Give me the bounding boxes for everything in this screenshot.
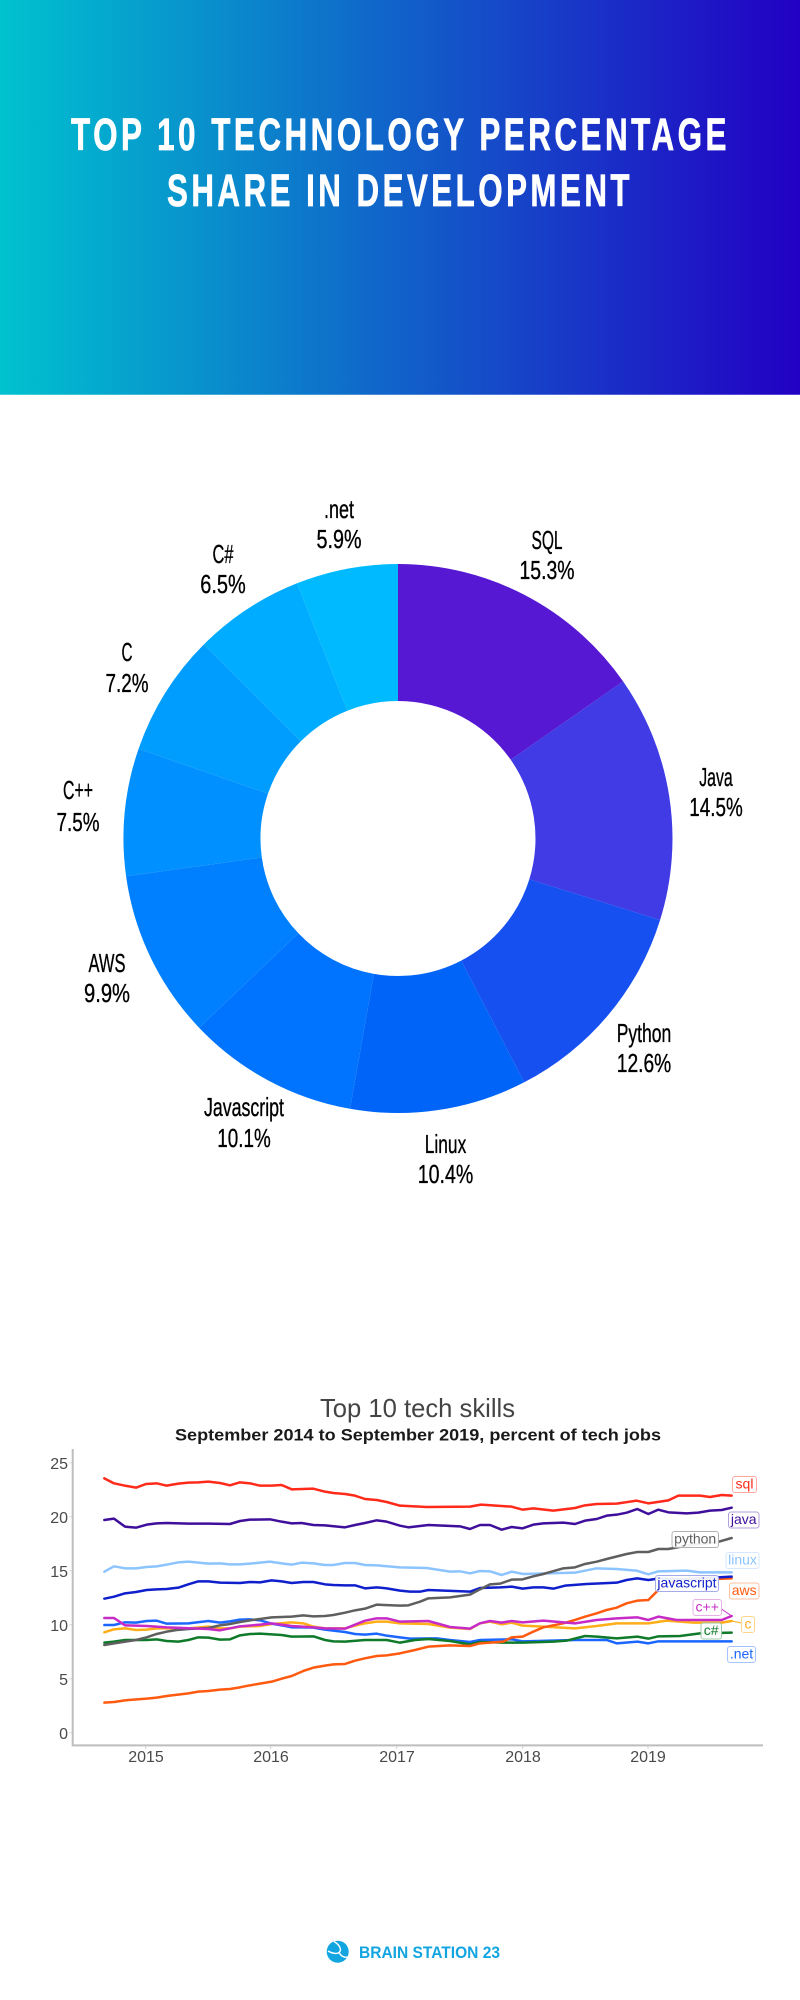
- tag: c++: [693, 1598, 732, 1616]
- slice: AWS: [126, 857, 298, 1028]
- slice: C++: [123, 749, 268, 876]
- line chart axes: 2015: [128, 1749, 164, 1766]
- tag: c: c: [744, 1616, 752, 1632]
- slice: Python: [461, 879, 660, 1082]
- line chart axes: 2019: [630, 1749, 666, 1766]
- series: c++: [104, 1616, 732, 1630]
- brand name: BRAIN STATION 23: [359, 1943, 500, 1962]
- label: Python: 12.6%: [617, 1048, 671, 1078]
- label: AWS: 9.9%: [84, 978, 130, 1008]
- line chart series: [104, 1478, 732, 1703]
- slice: Javascript: [199, 933, 374, 1109]
- line chart axes: 15: [50, 1564, 68, 1581]
- slice: Linux: [350, 961, 524, 1113]
- series: aws: [104, 1578, 732, 1703]
- tag: java: java: [730, 1511, 757, 1527]
- line chart axes: 2016: [253, 1749, 289, 1766]
- tag: python: [672, 1530, 732, 1548]
- donut chart: [123, 564, 672, 1113]
- label: Linux: Linux: [425, 1129, 466, 1159]
- label: C#: [200, 539, 246, 599]
- slice: .net: [297, 564, 398, 711]
- tag: c#: c#: [704, 1622, 719, 1638]
- label: Javascript: Javascript: [204, 1092, 285, 1122]
- label: C#: C#: [212, 539, 234, 569]
- series: javascript: [104, 1577, 732, 1599]
- line chart axes: 2018: [505, 1749, 541, 1766]
- tag: c#: [701, 1622, 722, 1639]
- series: linux: [104, 1562, 732, 1575]
- label: C: 7.2%: [106, 668, 148, 698]
- tag: javascript: javascript: [656, 1574, 717, 1590]
- label: C: C: [122, 637, 132, 667]
- line chart axes: 5: [59, 1672, 68, 1689]
- line chart axes: [50, 1449, 763, 1766]
- label: C#: 6.5%: [200, 569, 246, 599]
- label: SQL: SQL: [532, 525, 562, 555]
- tag: .net: .net: [730, 1646, 753, 1662]
- tag: sql: sql: [736, 1476, 753, 1492]
- label: .net: [316, 494, 362, 554]
- tag: c++: c++: [696, 1598, 719, 1614]
- title: [71, 109, 730, 216]
- label: AWS: [84, 948, 130, 1008]
- label: Java: 14.5%: [689, 792, 743, 822]
- label: C: [106, 637, 148, 698]
- label: Linux: [418, 1129, 473, 1189]
- tag: linux: linux: [728, 1552, 757, 1568]
- logo: [327, 1941, 500, 1963]
- tag: aws: aws: [732, 1582, 757, 1598]
- series: c#: [104, 1633, 732, 1644]
- series: python: [104, 1538, 732, 1645]
- series: java: [104, 1508, 732, 1530]
- label: Javascript: 10.1%: [217, 1123, 271, 1153]
- label: C++: C++: [63, 775, 93, 805]
- label: Java: [689, 762, 743, 822]
- label: .net: .net: [324, 494, 355, 524]
- line chart axes: 0: [59, 1726, 68, 1743]
- label: C++: [56, 775, 100, 837]
- label: Linux: 10.4%: [418, 1159, 473, 1189]
- line chart axes: 2017: [379, 1749, 415, 1766]
- label: SQL: [520, 525, 574, 585]
- label: Javascript: [204, 1092, 285, 1153]
- label: .net: 5.9%: [316, 524, 362, 554]
- label: AWS: AWS: [88, 948, 126, 978]
- line chart axes: 10: [50, 1618, 68, 1635]
- line chart axes: 20: [50, 1510, 68, 1527]
- chart subtitle: September 2014 to September 2019, percent of tech jobs: [175, 1426, 661, 1444]
- label: SQL: 15.3%: [520, 555, 574, 585]
- tag: python: python: [674, 1530, 716, 1546]
- icon: brain globe: [327, 1941, 349, 1963]
- series: sql: [104, 1478, 732, 1511]
- label: Python: Python: [617, 1018, 671, 1048]
- tag: c: [732, 1616, 754, 1632]
- chart title: Top 10 tech skills: [320, 1393, 515, 1423]
- slice: Java: [511, 681, 672, 920]
- slice: SQL: [398, 564, 623, 760]
- line chart axes: 25: [50, 1456, 68, 1473]
- slice: C: [139, 644, 301, 794]
- label: Python: [617, 1018, 671, 1078]
- series: .net: [104, 1619, 732, 1643]
- header banner: [0, 0, 800, 395]
- series: c: [104, 1621, 732, 1632]
- slice: C#: [204, 583, 347, 741]
- label: Java: Java: [699, 762, 733, 792]
- label: C++: 7.5%: [56, 807, 100, 837]
